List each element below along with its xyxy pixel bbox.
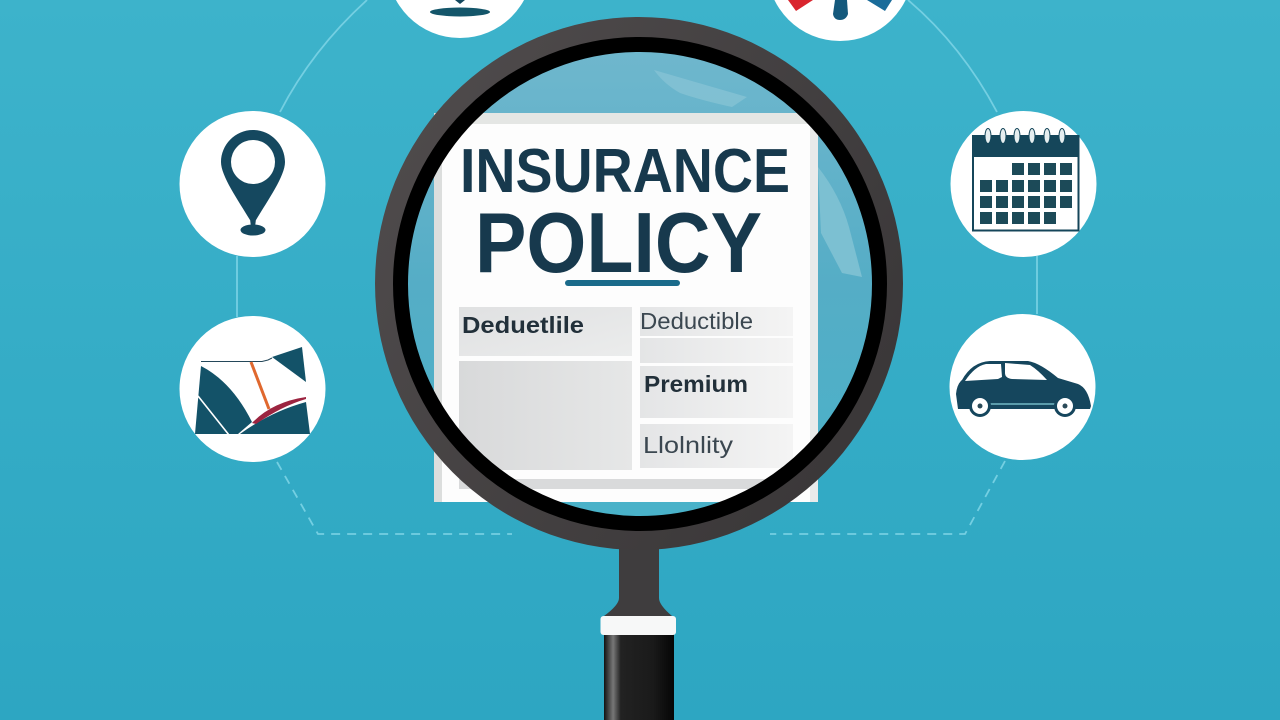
table cell: premium [640, 366, 793, 418]
icon: car in circle [950, 314, 1096, 460]
icon: open book in circle [180, 316, 326, 462]
table cell: deductible right [640, 307, 793, 336]
table cell: blank left [459, 361, 632, 470]
table cell: blank right [640, 338, 793, 363]
table cell: liability: Llolnlity [643, 432, 734, 458]
table footer bar [459, 479, 793, 489]
icon: top left pin in circle [387, 0, 533, 38]
calendar day squares [980, 163, 1072, 224]
icon: calendar in circle [950, 111, 1096, 257]
table cell: premium: Premium [644, 371, 748, 397]
lens glass [406, 50, 874, 518]
table cell: deductible left [459, 307, 632, 356]
title underline [565, 280, 680, 286]
calendar spiral rings [985, 128, 1065, 144]
document title [460, 137, 790, 291]
table cell: liability [640, 424, 793, 468]
connector lines between icons [237, 0, 1037, 534]
document title: POLICY [475, 196, 762, 291]
icon: top right gauge in circle [767, 0, 913, 41]
policy document [434, 113, 818, 502]
table cell: deductible left: Deduetlile [462, 312, 584, 338]
icon: location pin in circle [180, 111, 326, 257]
magnifier handle [600, 545, 676, 720]
document title: INSURANCE [460, 137, 790, 206]
magnifier ring [375, 17, 903, 550]
table cell: deductible right: Deductible [640, 308, 753, 334]
